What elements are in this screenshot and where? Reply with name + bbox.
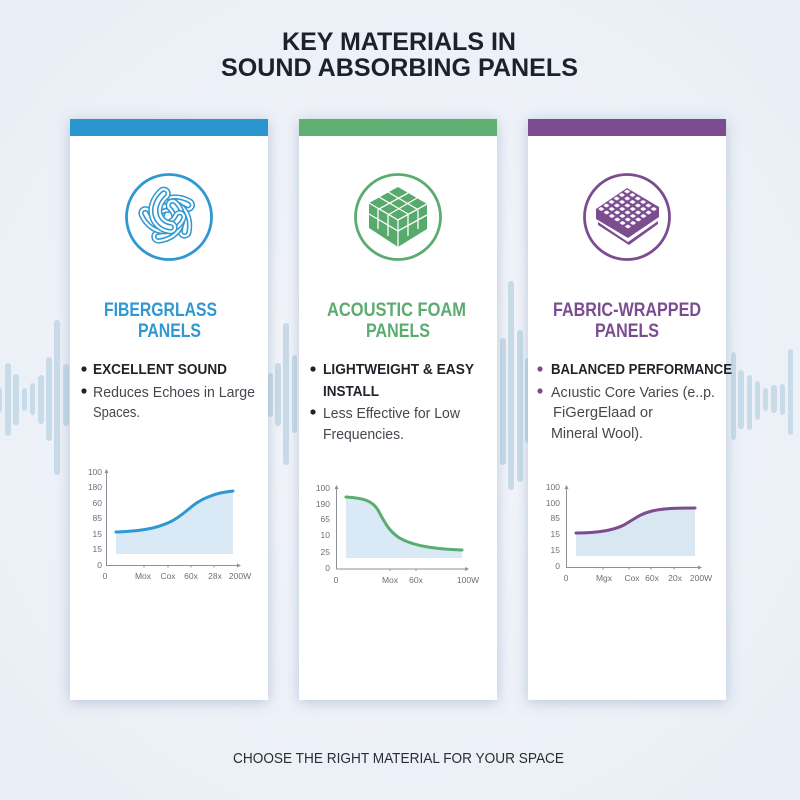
- line chart: falling curve: 65: [321, 514, 330, 524]
- line chart: plateau curve: 0: [564, 573, 569, 583]
- panel heading: [104, 300, 217, 342]
- panel heading: PANELS: [138, 321, 201, 342]
- line chart: rising curve: Cox: [160, 571, 176, 581]
- card background: [528, 119, 726, 700]
- bullet list: INSTALL: [323, 384, 379, 400]
- line chart: plateau curve: 100: [546, 498, 560, 508]
- icon: fabric panel: [584, 174, 670, 260]
- panel heading: PANELS: [366, 321, 430, 342]
- line chart: plateau curve: 15: [551, 529, 560, 539]
- footer tagline: CHOOSE THE RIGHT MATERIAL FOR YOUR SPACE: [233, 750, 564, 767]
- line chart: rising curve: 200W: [229, 571, 251, 581]
- bullet list: LIGHTWEIGHT & EASY: [323, 362, 474, 378]
- line chart: rising curve: 28x: [208, 571, 223, 581]
- card background: [299, 119, 497, 700]
- line chart: rising curve: 60x: [184, 571, 199, 581]
- card background: [70, 119, 268, 700]
- line chart: rising curve: 0: [103, 571, 108, 581]
- panel: fabric-wrapped: [528, 119, 732, 700]
- bullet list: Spaces.: [93, 405, 140, 421]
- line chart: rising curve: Mox: [135, 571, 152, 581]
- line chart: plateau curve: 85: [551, 513, 560, 523]
- header bar: [70, 119, 268, 136]
- line chart: falling curve: 25: [321, 547, 330, 557]
- bullet list: BALANCED PERFORMANCE: [551, 362, 732, 378]
- icon: fiber knot: [126, 174, 212, 260]
- line chart: falling curve: 190: [316, 499, 330, 509]
- bullet list: Frequencies.: [323, 427, 404, 443]
- line chart: plateau curve: 15: [551, 545, 560, 555]
- line chart: falling curve: Mox: [382, 575, 399, 585]
- line chart: falling curve: 10: [321, 530, 330, 540]
- line chart: plateau curve: Mgx: [596, 573, 613, 583]
- line chart: plateau curve: [546, 482, 712, 583]
- line chart: plateau curve: 60x: [645, 573, 660, 583]
- line chart: rising curve: 15: [93, 529, 102, 539]
- line chart: falling curve: 60x: [409, 575, 424, 585]
- panel: acoustic foam: [299, 119, 497, 700]
- line chart: falling curve: 100: [316, 483, 330, 493]
- panel heading: FABRIC-WRAPPED: [553, 300, 701, 321]
- bullet list: [310, 362, 474, 443]
- panel heading: PANELS: [595, 321, 659, 342]
- bullet list: [81, 362, 255, 421]
- panel heading: [327, 300, 466, 342]
- line chart: rising curve: 60: [93, 498, 102, 508]
- line chart: falling curve: 0: [334, 575, 339, 585]
- line chart: falling curve: 100W: [457, 575, 479, 585]
- bullet list: [537, 362, 732, 442]
- bullet list: Less Effective for Low: [323, 406, 460, 422]
- line chart: plateau curve: 0: [555, 561, 560, 571]
- line chart: falling curve: 0: [325, 563, 330, 573]
- panel: fiberglass: [70, 119, 268, 700]
- line chart: plateau curve: 100: [546, 482, 560, 492]
- panel heading: [553, 300, 701, 342]
- sound waveform backdrop: [0, 281, 793, 490]
- line chart: falling curve: [316, 483, 479, 585]
- line chart: rising curve: 15: [93, 544, 102, 554]
- title: KEY MATERIALS IN: [282, 28, 516, 56]
- line chart: plateau curve: 20x: [668, 573, 683, 583]
- line chart: rising curve: [88, 467, 251, 581]
- line chart: rising curve: 100: [88, 467, 102, 477]
- line chart: plateau curve: 200W: [690, 573, 712, 583]
- line chart: rising curve: 180: [88, 482, 102, 492]
- line chart: rising curve: 85: [93, 513, 102, 523]
- title: [221, 28, 578, 82]
- line chart: rising curve: 0: [97, 560, 102, 570]
- panel heading: ACOUSTIC FOAM: [327, 300, 466, 321]
- bullet list: Mineral Wool).: [551, 426, 643, 442]
- panel heading: FIBERGRLASS: [104, 300, 217, 321]
- bullet list: Acıustic Core Varies (e..p.: [551, 385, 715, 401]
- title: SOUND ABSORBING PANELS: [221, 54, 578, 82]
- header bar: [299, 119, 497, 136]
- bullet list: Reduces Echoes in Large: [93, 385, 255, 401]
- line chart: plateau curve: Cox: [624, 573, 640, 583]
- bullet list: EXCELLENT SOUND: [93, 362, 227, 378]
- icon: foam cube: [356, 174, 440, 260]
- header bar: [528, 119, 726, 136]
- bullet list: FiGergElaad or: [553, 405, 653, 421]
